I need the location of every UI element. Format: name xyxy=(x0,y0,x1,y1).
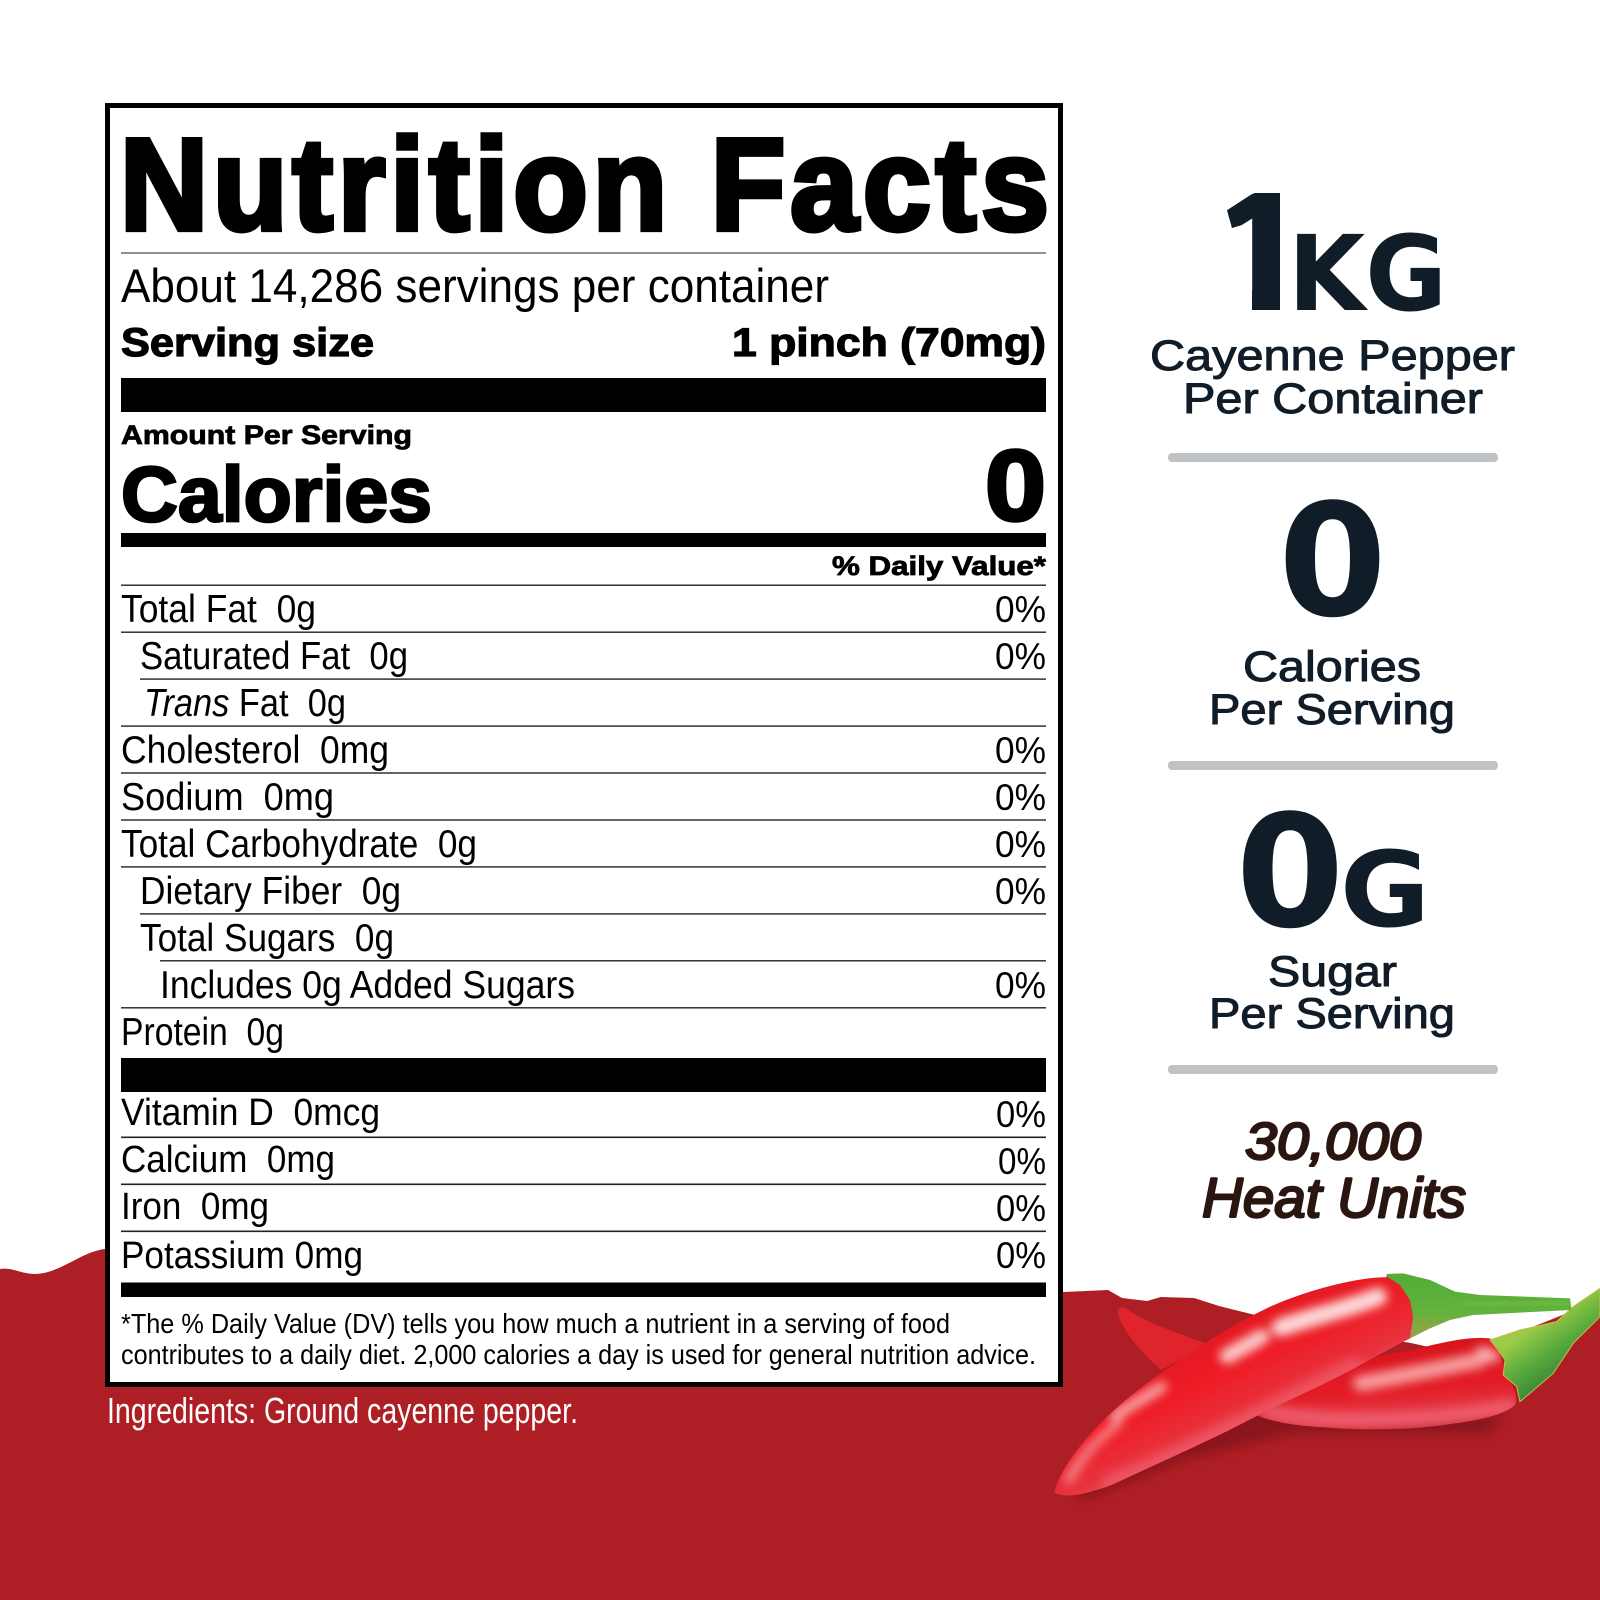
stat: 0g sugar: Sugar xyxy=(1268,948,1397,996)
stat: heat units: Heat Units xyxy=(1202,1166,1466,1229)
nutrient rows: Sodium 0mg xyxy=(121,776,334,819)
stat: 1kg per container: 1 xyxy=(1216,158,1309,346)
stat: 1kg per container: Per Container xyxy=(1183,375,1483,423)
nutrient rows: 0% xyxy=(995,730,1046,771)
ingredients: Ingredients: Ground cayenne pepper. xyxy=(107,1390,578,1431)
illustration: chili peppers xyxy=(1047,1270,1600,1503)
stat: 0 calories: Calories xyxy=(1243,643,1421,691)
nutrition facts panel xyxy=(108,106,1060,1384)
stat: 0 calories xyxy=(1209,470,1455,734)
stat: 1kg per container: KG xyxy=(1288,213,1447,335)
vitamin and mineral rows: 0% xyxy=(996,1094,1046,1135)
stat: 0 calories: Per Serving xyxy=(1209,686,1455,734)
footnote: contributes to a daily diet. 2,000 calories a day is used for general nutrition advice. xyxy=(121,1339,1036,1370)
amount per serving: Amount Per Serving xyxy=(121,420,412,450)
nutrient rows: 0% xyxy=(995,777,1046,818)
nutrient rows: 0% xyxy=(995,636,1046,677)
vitamin and mineral rows: Calcium 0mg xyxy=(121,1139,335,1181)
vitamin and mineral rows: Iron 0mg xyxy=(121,1186,269,1228)
background: red torn paper wave xyxy=(0,1249,1600,1600)
stat: heat units xyxy=(1202,1113,1466,1229)
front chili body xyxy=(1054,1277,1414,1496)
nutrient rows: Saturated Fat 0g xyxy=(140,635,408,678)
vitamin and mineral rows: 0% xyxy=(998,1141,1046,1182)
nutrient rows: Cholesterol 0mg xyxy=(121,729,389,772)
vitamin and mineral rows: Potassium 0mg xyxy=(121,1235,363,1277)
calories: 0 xyxy=(985,430,1046,542)
serving size: Serving size xyxy=(121,321,374,365)
serving size: 1 pinch (70mg) xyxy=(732,321,1046,365)
stat: 1kg per container: Cayenne Pepper xyxy=(1150,332,1515,380)
nutrient rows: 0% xyxy=(995,965,1046,1006)
daily value header: % Daily Value* xyxy=(832,551,1047,581)
nutrient rows: 0% xyxy=(995,589,1046,630)
stat: 0g sugar: G xyxy=(1340,829,1430,951)
panel frame xyxy=(108,106,1060,1384)
nutrient rows xyxy=(121,584,1046,1054)
nutrient rows: Protein 0g xyxy=(121,1011,284,1054)
stat: 0g sugar: 0 xyxy=(1236,781,1344,963)
footnote: *The % Daily Value (DV) tells you how much a nutrient in a serving of food xyxy=(121,1308,950,1339)
vitamin and mineral rows: 0% xyxy=(996,1188,1046,1229)
nutrient rows: 0% xyxy=(995,871,1046,912)
nutrient rows: Dietary Fiber 0g xyxy=(140,870,401,913)
calories: Calories xyxy=(121,450,432,538)
front chili calyx and stem xyxy=(1383,1273,1571,1338)
back chili calyx and stem xyxy=(1490,1288,1600,1402)
serving size xyxy=(121,321,1046,365)
stat: 0g sugar xyxy=(1209,781,1455,1038)
back chili tail xyxy=(1118,1308,1208,1370)
servings per container: About 14,286 servings per container xyxy=(121,259,829,312)
nutrient rows: Includes 0g Added Sugars xyxy=(160,964,575,1007)
stat: 0 calories: 0 xyxy=(1278,470,1387,652)
nutrient rows: Total Carbohydrate 0g xyxy=(121,823,477,866)
stat: 0g sugar: Per Serving xyxy=(1209,990,1455,1038)
stat: 1kg per container xyxy=(1152,193,1515,414)
footnote xyxy=(121,1308,1036,1370)
title: Nutrition Facts xyxy=(120,112,1049,257)
nutrient rows: Total Fat 0g xyxy=(121,588,316,631)
back chili body xyxy=(1258,1338,1516,1430)
calories xyxy=(121,430,1046,542)
nutrient rows: Trans Fat 0g xyxy=(144,682,346,725)
nutrient rows: Total Sugars 0g xyxy=(140,917,394,960)
vitamin and mineral rows: Vitamin D 0mcg xyxy=(121,1092,380,1134)
nutrient rows: 0% xyxy=(995,824,1046,865)
stat: heat units: 30,000 xyxy=(1245,1113,1421,1171)
front chili highlights xyxy=(1069,1297,1377,1483)
vitamin and mineral rows: 0% xyxy=(996,1235,1046,1276)
vitamin and mineral rows xyxy=(121,1092,1046,1277)
